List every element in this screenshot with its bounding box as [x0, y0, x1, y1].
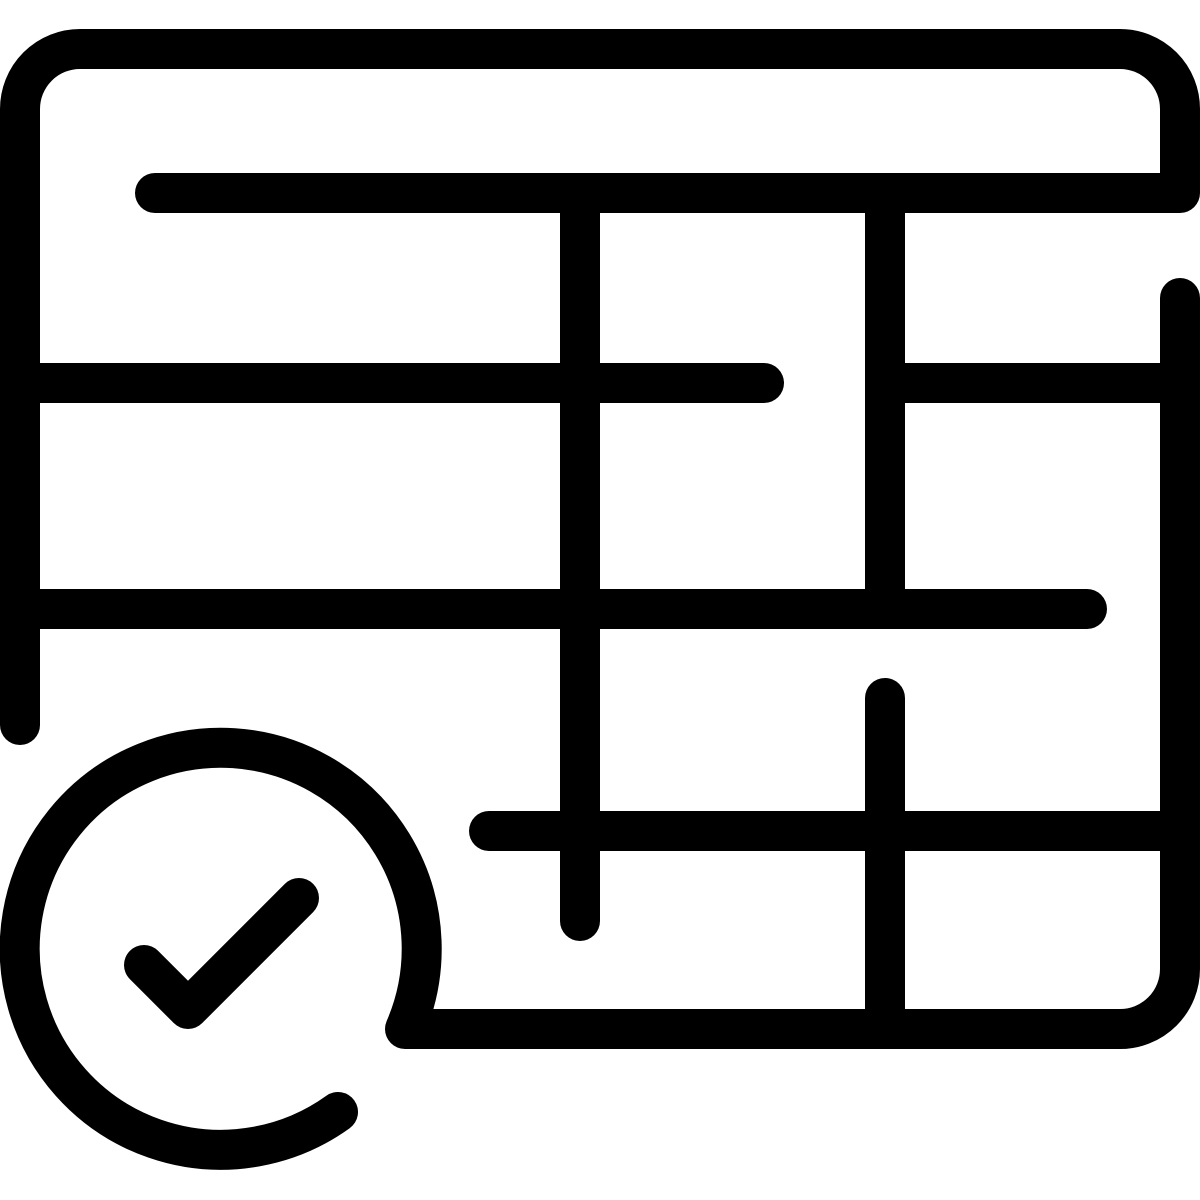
icon: checkmark: [144, 898, 299, 1009]
table frame top and header: [20, 49, 1180, 725]
table frame right, bottom and check circle: [20, 298, 1180, 1150]
grid lines: [20, 193, 1180, 1029]
